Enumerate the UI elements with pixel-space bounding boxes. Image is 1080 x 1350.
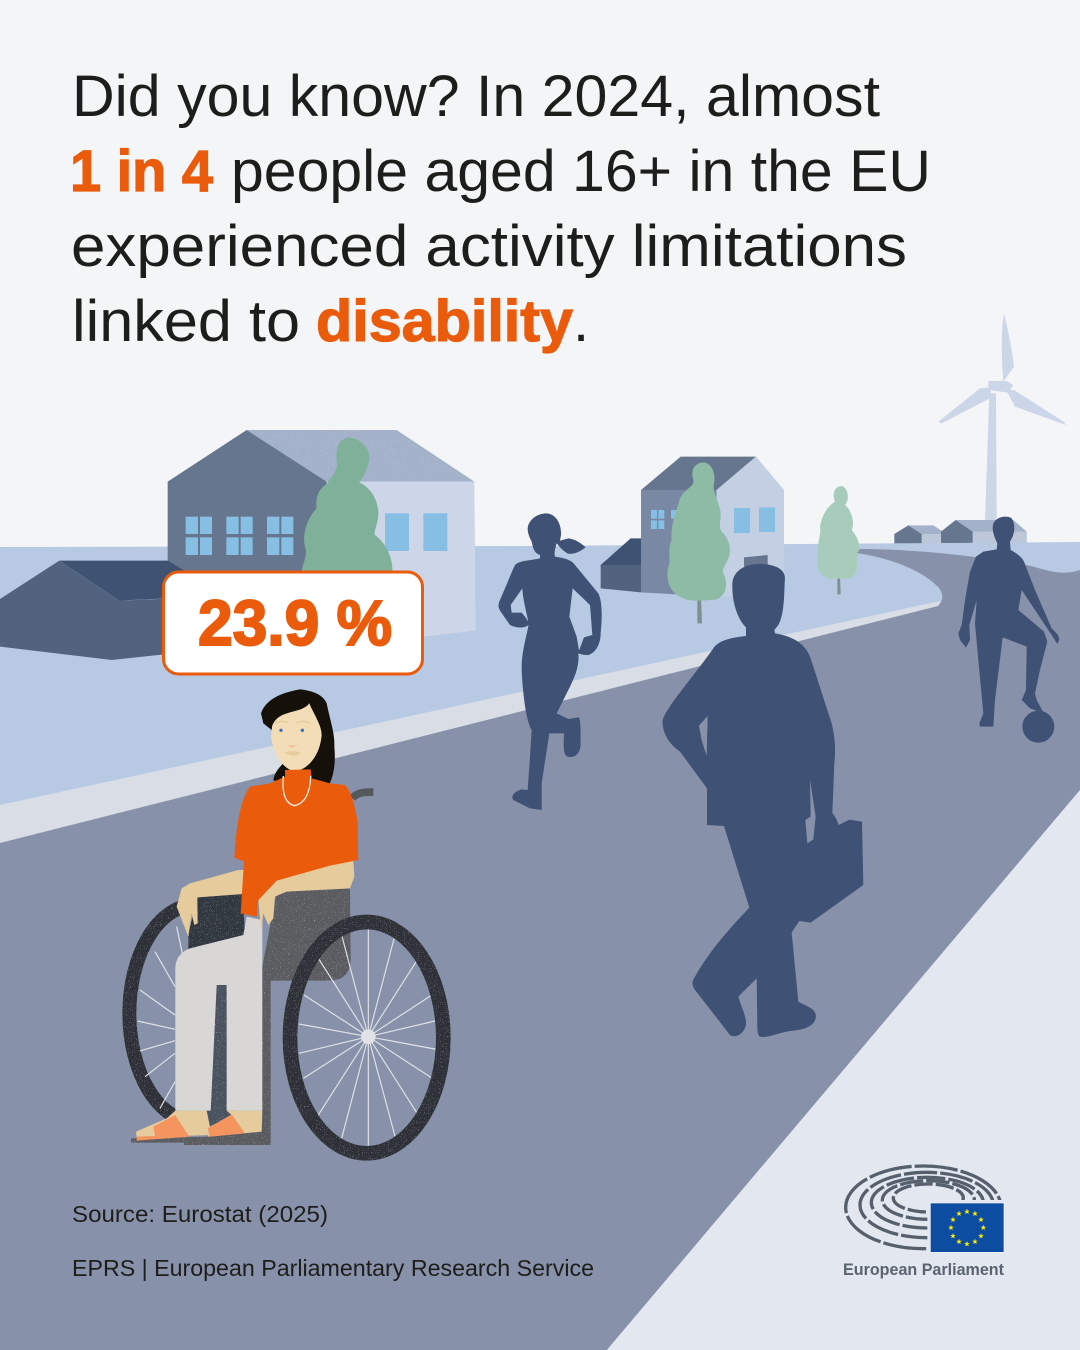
logo wordmark: European Parliament <box>843 1261 1004 1279</box>
face <box>271 703 322 771</box>
title: experienced activity limitations <box>71 214 907 279</box>
ground <box>0 542 1080 900</box>
woman in wheelchair <box>129 689 443 1153</box>
rear left wheel <box>129 905 261 1122</box>
tree by large house <box>302 437 393 573</box>
credit line: EPRS | European Parliamentary Research Service <box>72 1255 594 1281</box>
silhouette: runner <box>499 513 602 810</box>
large house left <box>0 430 476 660</box>
necklace <box>283 776 311 806</box>
silhouette: person with ball <box>958 517 1059 743</box>
title: people aged 16+ in the EU <box>231 139 931 204</box>
title: Did you know? In 2024, almost <box>72 64 880 129</box>
orange top <box>234 769 358 917</box>
callout: 23.9 % <box>164 572 422 674</box>
windows <box>186 513 447 555</box>
title: linked to <box>72 289 300 354</box>
pavement <box>0 601 945 846</box>
houses and trees in the distance <box>601 457 859 623</box>
road <box>0 549 1080 1350</box>
trousers <box>175 917 262 1111</box>
tree two <box>817 486 859 594</box>
wheelchair seat and frame <box>131 888 351 1145</box>
front right wheel <box>290 922 443 1153</box>
title: disability <box>316 289 573 354</box>
title <box>70 64 931 354</box>
low house left <box>0 561 183 660</box>
title: . <box>573 289 589 354</box>
European Parliament logo <box>846 1166 1007 1255</box>
gap between legs <box>206 985 233 1128</box>
pale verge <box>607 790 1080 1350</box>
tree one <box>667 462 730 623</box>
arms <box>177 860 354 937</box>
distant farm buildings <box>894 520 1027 544</box>
wheelchair handle <box>352 792 373 798</box>
hair <box>261 689 335 784</box>
EU flag <box>930 1203 1004 1252</box>
title: 1 in 4 <box>70 139 213 204</box>
callout: 23.9 %: 23.9 % <box>198 587 392 659</box>
silhouette: walker with briefcase <box>663 564 863 1037</box>
feet and sandals <box>136 1111 262 1141</box>
source note: Source: Eurostat (2025) <box>72 1201 328 1227</box>
hemicycle <box>846 1166 1001 1249</box>
wind turbine <box>938 314 1066 521</box>
armrest panel <box>188 894 245 950</box>
